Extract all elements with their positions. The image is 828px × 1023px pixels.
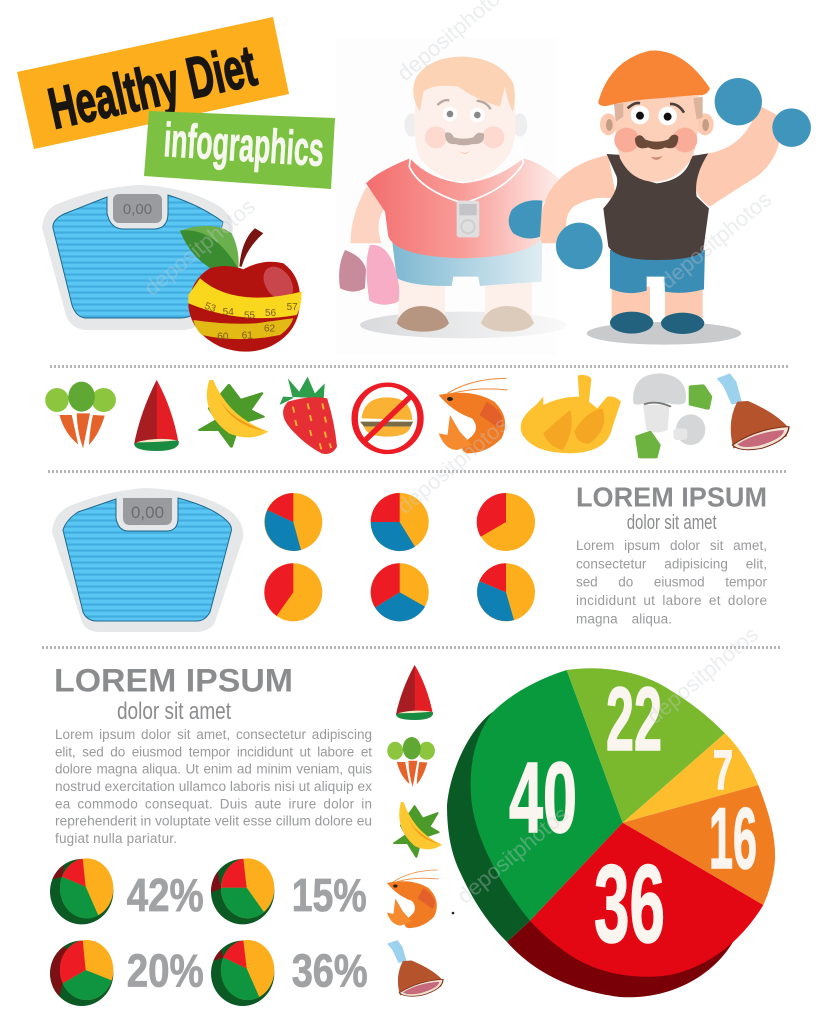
icon: apple with measuring tape: 53 (203, 301, 218, 315)
icon: mushrooms and broccoli (633, 373, 710, 457)
icon column: banana (394, 802, 442, 857)
paragraph: Lorem ipsum dolor sit amet, (576, 538, 767, 553)
paragraph: elit, sed do eiusmod tempor incididunt ut labore et (55, 744, 372, 759)
title text: Healthy Diet (43, 33, 262, 142)
icon: apple with measuring tape: 61 (242, 330, 253, 341)
pie 42% (50, 858, 113, 924)
subheading: dolor sit amet (117, 698, 231, 725)
icon column: carrots (387, 737, 435, 787)
text: depositphotos (655, 187, 776, 294)
subheading: dolor sit amet (627, 512, 717, 534)
food icon row (45, 373, 789, 457)
pie 3 (477, 493, 535, 551)
icon: carrots (45, 382, 116, 448)
scale display: 0,00 (131, 503, 164, 522)
icon: apple with measuring tape: 57 (287, 302, 298, 313)
shirt (366, 158, 560, 258)
paragraph: reprehenderit in voluptate velit esse cillum dolore eu (55, 814, 372, 829)
title banner (17, 17, 289, 149)
text: depositphotos (392, 412, 513, 519)
shorts (610, 250, 705, 293)
heading: LOREM IPSUM (54, 663, 293, 699)
value labels: 16 (709, 791, 757, 887)
pie 5 (371, 563, 429, 621)
left arm and towel (339, 187, 399, 305)
pie charts grid (264, 493, 535, 621)
icon: apple with measuring tape: 55 (244, 310, 256, 321)
value labels: 7 (713, 738, 733, 801)
paragraph: sed do eiusmod tempor (576, 575, 768, 590)
legs (612, 287, 703, 318)
large 3D pie chart (447, 668, 775, 997)
icon: apple with measuring tape: 62 (264, 324, 276, 335)
heading: LOREM IPSUM (576, 482, 767, 513)
pie 6 (477, 563, 535, 621)
icon: bathroom scale middle (52, 488, 243, 632)
text: depositphotos (642, 622, 763, 729)
value labels (509, 670, 757, 966)
pie 2 (371, 493, 429, 551)
dark red side (507, 921, 733, 997)
paragraph: fugiat nulla pariatur. (55, 831, 177, 846)
legs (398, 280, 532, 317)
icon: strawberry (280, 377, 337, 454)
shoes (610, 312, 704, 334)
raised arm (693, 105, 782, 207)
lower arm (540, 155, 617, 243)
icon: fit man with dumbbells (509, 51, 811, 345)
value labels: 36 (594, 843, 665, 966)
paragraph: Lorem ipsum dolor sit amet, consectetur adipiscing (55, 727, 372, 742)
icon: watermelon (134, 380, 179, 451)
value labels: 40 (509, 742, 577, 854)
ground shadow (587, 322, 741, 345)
subtitle text: infographics (162, 114, 325, 177)
shoes (397, 306, 534, 332)
icon column: shrimp (387, 870, 439, 928)
icon: ham (717, 373, 789, 450)
pie 4 (264, 563, 322, 621)
ground shadow (360, 312, 567, 338)
icon: bathroom scale top (42, 185, 233, 330)
value labels: 22 (606, 670, 662, 770)
percentage labels: 36% (292, 945, 368, 997)
small 3D pie charts (50, 858, 274, 1006)
pie 1 (264, 493, 322, 551)
subtitle banner (144, 111, 335, 189)
paragraph: magna aliqua. (576, 611, 672, 626)
icon: fat man faded (337, 38, 567, 355)
dark green side (447, 712, 530, 942)
pie 36% (211, 940, 274, 1006)
orange slice 16 (623, 785, 775, 905)
dumbbells (509, 78, 811, 269)
pie 15% (211, 858, 274, 924)
tank top (603, 153, 709, 260)
paragraph (55, 727, 372, 846)
text: depositphotos (139, 194, 260, 301)
scale display (113, 194, 162, 223)
head (404, 57, 527, 182)
earphones and music player (409, 140, 523, 237)
paragraph: dolore magna aliqua. Ut enim ad minim veniam, quis (55, 762, 372, 777)
red slice 36 (530, 823, 763, 977)
percentage labels: 42% (127, 869, 204, 921)
text: depositphotos (452, 802, 573, 909)
pie 20% (50, 940, 113, 1006)
scale display: 0,00 (123, 201, 152, 218)
icon: apple with measuring tape: 56 (265, 308, 277, 319)
icon: apple with measuring tape (180, 226, 302, 352)
paragraph: ea commodo consequat. Duis aute irure dolor in (55, 796, 372, 811)
paragraph (576, 538, 768, 626)
text block right (576, 482, 768, 626)
icon: shrimp (439, 378, 507, 453)
light green slice 22 (567, 668, 725, 823)
paragraph: incididunt ut labore et dolore (576, 593, 767, 608)
shorts (392, 237, 542, 286)
percentage labels (127, 869, 368, 997)
icon: apple with measuring tape: 54 (223, 307, 234, 318)
icon: no burger (355, 385, 421, 452)
icon: apple with measuring tape: 60 (217, 331, 229, 342)
head (598, 51, 714, 182)
icon column: watermelon (396, 665, 433, 720)
icon: banana (199, 380, 268, 447)
percentage labels: 20% (127, 945, 204, 997)
scale display (123, 498, 172, 525)
icon column: ham (387, 940, 443, 996)
yellow slice 7 (623, 733, 758, 823)
paragraph: nostrud exercitation ullamco laboris nisi ut aliquip ex (55, 779, 372, 794)
icon: chicken (521, 375, 621, 453)
paragraph: consectetur adipisicing elit, (576, 556, 767, 571)
green slice 40 (471, 670, 623, 921)
text block left (54, 663, 372, 846)
percentage labels: 15% (292, 869, 367, 921)
